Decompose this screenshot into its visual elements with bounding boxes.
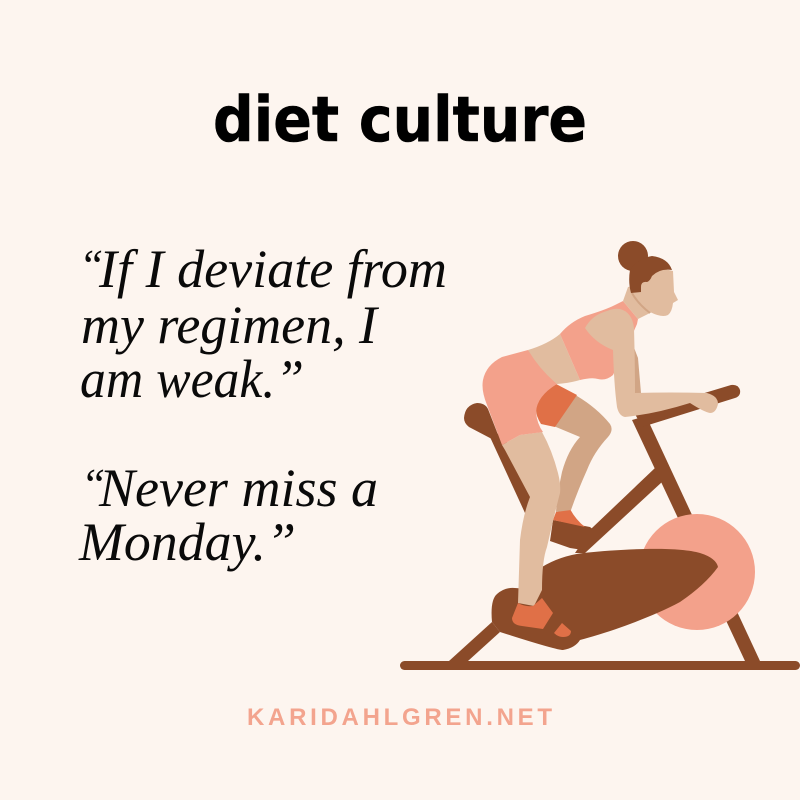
quote: regimen: “ (79, 241, 103, 290)
toe (554, 623, 571, 637)
flywheel (639, 514, 755, 630)
hair (629, 256, 672, 293)
bun (618, 241, 648, 271)
shorts (482, 350, 557, 445)
bike ground bar (400, 661, 800, 670)
near arm (585, 309, 718, 417)
face (638, 268, 678, 316)
website footer: KARIDAHLGREN.NET (247, 704, 552, 731)
torso (528, 334, 580, 384)
shorts trim (536, 384, 577, 427)
quote: monday: “ (81, 460, 105, 509)
far arm (632, 345, 641, 396)
quote: regimen: If I deviate from (98, 239, 447, 299)
quote: monday (78, 458, 378, 572)
back leg (540, 384, 612, 512)
quote: regimen: am weak.” (80, 349, 304, 409)
quote: monday: Monday.” (78, 512, 296, 572)
bike handlebar (635, 385, 740, 427)
quote: regimen: my regimen, I (81, 295, 380, 355)
crank body (492, 549, 718, 650)
back pedal (550, 520, 594, 550)
quote: monday: Never miss a (98, 458, 378, 518)
quote: regimen (79, 239, 447, 409)
neck (623, 285, 652, 319)
front leg (502, 432, 560, 606)
bike seat (464, 403, 502, 445)
bike frame back (449, 416, 760, 661)
front shoe (512, 598, 553, 629)
title: diet culture (213, 83, 587, 156)
crop top (560, 301, 638, 380)
back shoe (553, 509, 585, 527)
illustration: woman on exercise bike (400, 241, 800, 670)
neck shadow (632, 293, 650, 313)
